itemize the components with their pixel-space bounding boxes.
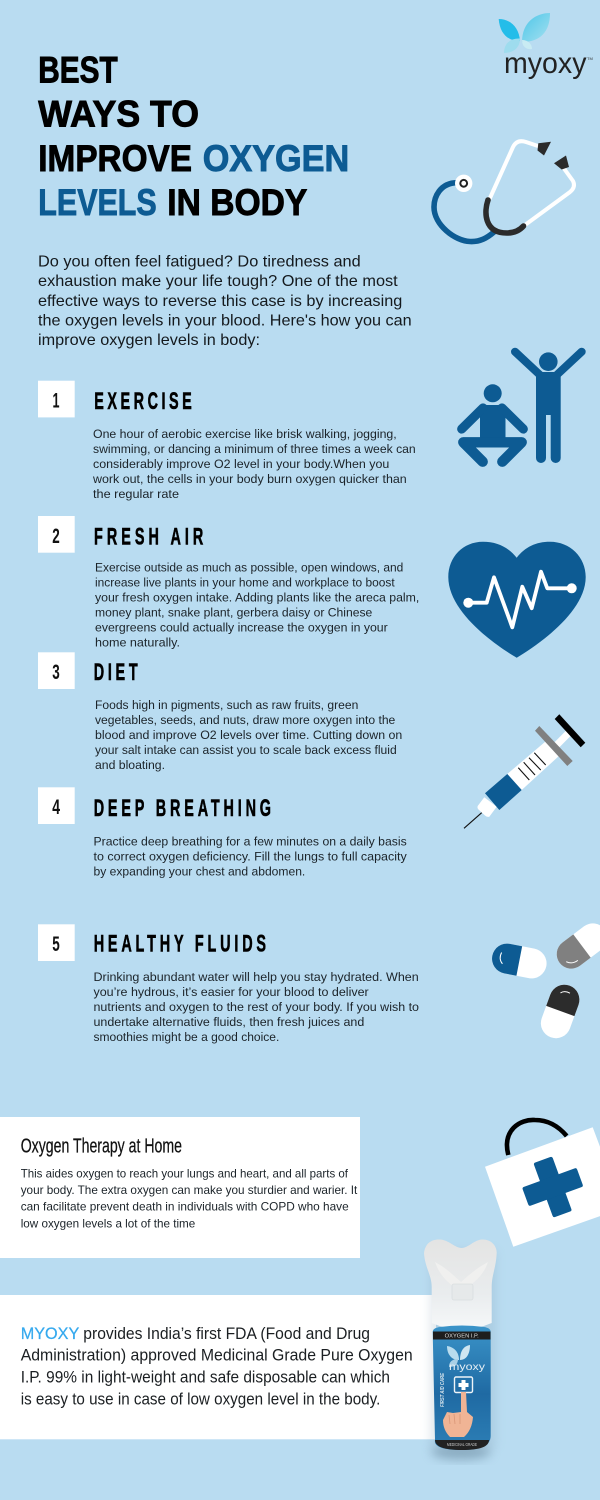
product: oxygen can — [424, 1239, 497, 1460]
section 4: deep breathing — [38, 787, 408, 878]
panel: myoxy product statement — [0, 1295, 436, 1439]
title: BEST — [38, 49, 118, 91]
intro text: Do you often feel fatigued? Do tiredness and — [38, 254, 361, 271]
panel: oxygen therapy at home: low oxygen levels a lot of the time — [21, 1216, 196, 1230]
product: oxygen can: FIRST AID CARE — [440, 1372, 446, 1407]
section 2: fresh air: Exercise outside as much as possible, open windows, and — [95, 561, 403, 575]
section 3: diet: and bloating. — [95, 758, 165, 772]
product: oxygen can: OXYGEN I.P. — [445, 1334, 479, 1340]
section 5: healthy fluids: undertake alternative fluids, then fresh juices and — [94, 1015, 364, 1029]
panel: myoxy product statement: MYOXY — [21, 1324, 79, 1343]
section 2: fresh air: FRESH AIR — [94, 524, 203, 550]
icon: syringe — [464, 714, 585, 828]
section 2: fresh air — [38, 516, 419, 650]
section 3: diet: your salt intake can assist you to scale back excess fluid — [95, 743, 397, 757]
section 1: exercise: considerably improve O2 level in your body.When you — [93, 457, 389, 471]
panel: oxygen therapy at home: can facilitate prevent death in individuals with COPD who have — [21, 1200, 349, 1214]
section 5: healthy fluids: 5 — [52, 932, 60, 956]
intro text: the oxygen levels in your blood. Here's how you can — [38, 312, 412, 330]
section 1: exercise: One hour of aerobic exercise like brisk walking, jogging, — [93, 427, 397, 441]
panel: oxygen therapy at home — [0, 1117, 360, 1258]
title: IN BODY — [167, 181, 307, 223]
section 1: exercise: 1 — [52, 388, 60, 412]
section 4: deep breathing: Practice deep breathing for a few minutes on a daily basis — [94, 834, 407, 848]
section 4: deep breathing: by expanding your chest and abdomen. — [94, 864, 305, 878]
section 1: exercise: EXERCISE — [94, 388, 192, 415]
section 3: diet: blood and improve O2 levels over time. Cutting down on — [95, 728, 402, 742]
section 2: fresh air: 2 — [52, 524, 60, 548]
title — [38, 49, 349, 223]
section 2: fresh air: home naturally. — [95, 636, 180, 650]
panel: oxygen therapy at home: your body. The extra oxygen can make you sturdier and warier. It — [21, 1183, 358, 1197]
section 3: diet: vegetables, seeds, and nuts, draw more oxygen into the — [95, 713, 395, 727]
section 2: fresh air: increase live plants in your home and workplace to boost — [95, 576, 395, 590]
section 5: healthy fluids: HEALTHY FLUIDS — [94, 931, 266, 958]
intro text: improve oxygen levels in body: — [38, 332, 260, 349]
section 5: healthy fluids: you’re hydrous, it’s easier for your blood to deliver — [94, 985, 369, 999]
intro text: exhaustion make your life tough? One of the most — [38, 273, 398, 290]
intro text — [38, 254, 412, 349]
title: IMPROVE — [38, 137, 192, 179]
panel: myoxy product statement: provides India’s first FDA (Food and Drug — [83, 1324, 370, 1343]
section 4: deep breathing: 4 — [52, 795, 60, 819]
panel: myoxy product statement: Administration) approved Medicinal Grade Pure Oxygen — [21, 1346, 413, 1365]
logo: myoxy: TM — [587, 56, 593, 61]
section 4: deep breathing: DEEP BREATHING — [94, 795, 271, 822]
icon: exercising figures — [462, 352, 582, 463]
section 1: exercise: work out, the cells in your body burn oxygen quicker than — [92, 472, 407, 486]
icon: first aid kit — [485, 1120, 600, 1247]
product: oxygen can: myoxy — [449, 1361, 486, 1373]
section 1: exercise: the regular rate — [93, 487, 179, 501]
section 1: exercise — [38, 381, 416, 501]
section 2: fresh air: money plant, snake plant, gerbera daisy or Chinese — [95, 606, 372, 620]
panel: oxygen therapy at home: This aides oxygen to reach your lungs and heart, and all parts of — [21, 1167, 349, 1181]
section 3: diet: DIET — [94, 659, 138, 686]
section 3: diet: 3 — [52, 660, 60, 684]
icon: stethoscope — [434, 141, 574, 242]
logo: myoxy — [499, 13, 593, 80]
section 4: deep breathing: to correct oxygen deficiency. Fill the lungs to full capacity — [94, 849, 408, 863]
product: oxygen can: MEDICINAL GRADE — [447, 1442, 477, 1447]
icon: capsules — [489, 918, 600, 1042]
section 5: healthy fluids: nutrients and oxygen to the rest of your body. If you wish to — [94, 1000, 419, 1014]
section 1: exercise: swimming, or dancing a minimum of three times a week can — [93, 442, 416, 456]
section 2: fresh air: your fresh oxygen intake. Adding plants like the areca palm, — [95, 591, 419, 605]
title: OXYGEN — [203, 137, 349, 179]
panel: myoxy product statement: I.P. 99% in light-weight and safe disposable can which — [21, 1367, 390, 1386]
section 5: healthy fluids — [38, 924, 419, 1044]
section 2: fresh air: evergreens could actually increase the oxygen in your — [95, 621, 388, 635]
title: WAYS TO — [38, 93, 199, 135]
logo: myoxy: myoxy — [504, 47, 586, 80]
panel: oxygen therapy at home: Oxygen Therapy at Home — [21, 1136, 182, 1158]
section 3: diet — [38, 652, 402, 772]
icon: heart with pulse — [448, 542, 586, 658]
section 5: healthy fluids: smoothies might be a good choice. — [94, 1030, 279, 1044]
intro text: effective ways to reverse this case is by increasing — [38, 293, 402, 310]
title: LEVELS — [38, 181, 157, 223]
section 5: healthy fluids: Drinking abundant water will help you stay hydrated. When — [94, 970, 419, 984]
section 3: diet: Foods high in pigments, such as raw fruits, green — [95, 698, 358, 712]
panel: myoxy product statement: is easy to use in case of low oxygen level in the body. — [21, 1389, 380, 1408]
